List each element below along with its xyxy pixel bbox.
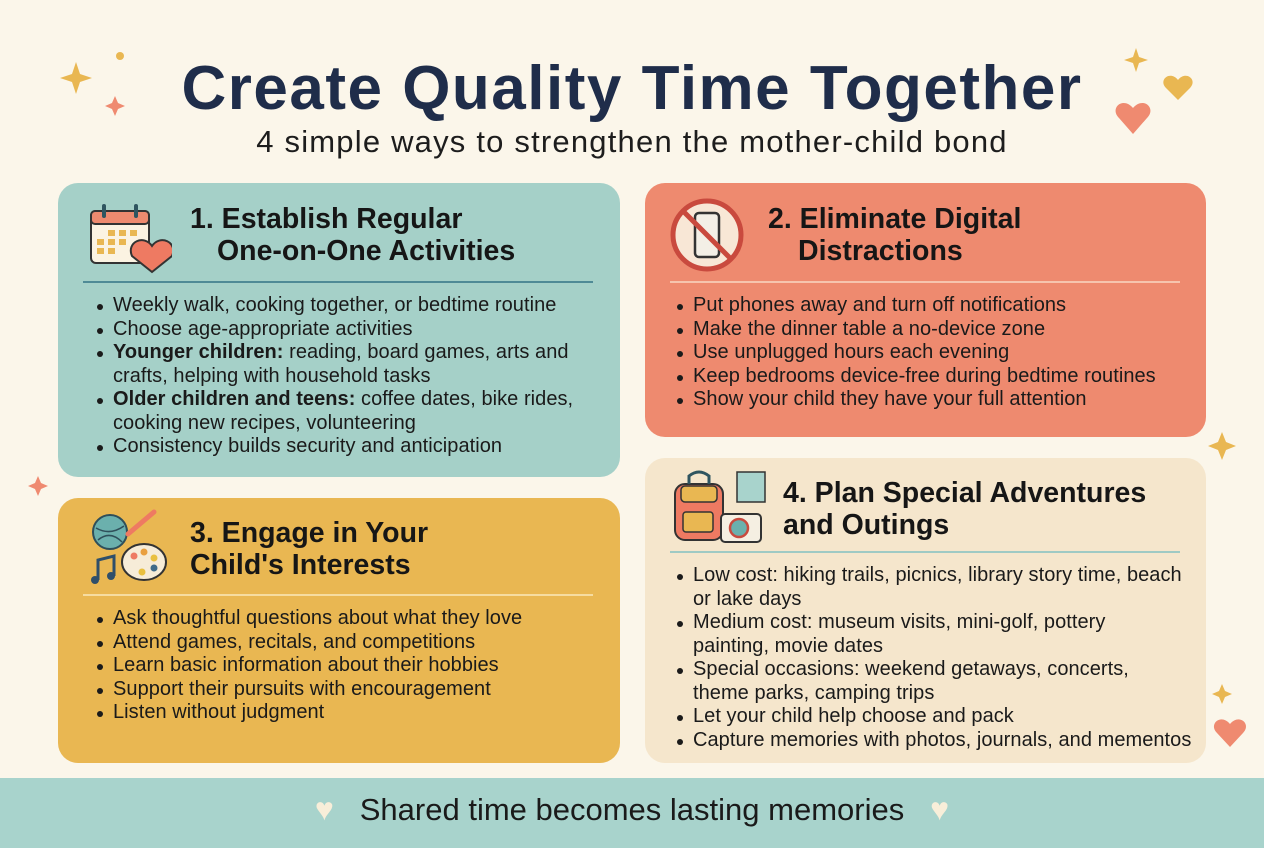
panel: 2 eliminate digital distractions — [645, 183, 1206, 437]
bullet list — [677, 294, 1156, 410]
bullet list: Make the dinner table a no-device zone — [693, 318, 1045, 340]
title: Create Quality Time Together — [181, 54, 1083, 123]
heading — [190, 203, 515, 267]
bullet list: Ask thoughtful questions about what they love — [113, 607, 522, 629]
bullet list: Learn basic information about their hobbies — [113, 654, 499, 676]
heading: 2. Eliminate Digital — [768, 203, 1021, 235]
bullet list: Medium cost: museum visits, mini-golf, pottery — [693, 611, 1105, 633]
bullet list: Use unplugged hours each evening — [693, 341, 1009, 363]
heading: and Outings — [783, 509, 949, 541]
bullet list: or lake days — [693, 588, 801, 610]
heading — [783, 477, 1146, 541]
bullet list: Low cost: hiking trails, picnics, library story time, beach — [693, 564, 1182, 586]
footer text with hearts: ♥ Shared time becomes lasting memories ♥ — [315, 791, 949, 827]
bullet list: cooking new recipes, volunteering — [113, 412, 416, 434]
bullet list: Weekly walk, cooking together, or bedtime routine — [113, 294, 556, 316]
panel: 1 one-on-one activities — [58, 183, 620, 477]
bullet list: Special occasions: weekend getaways, concerts, — [693, 658, 1129, 680]
subtitle: 4 simple ways to strengthen the mother-child bond — [256, 124, 1008, 159]
heading — [768, 203, 1021, 267]
bullet list: Younger children: reading, board games, arts and — [113, 341, 569, 363]
icon: no phone — [670, 198, 744, 272]
heading: 4. Plan Special Adventures — [783, 477, 1146, 509]
bullet list — [677, 564, 1191, 750]
icon: calendar with heart — [90, 204, 172, 274]
bullet list: Show your child they have your full attention — [693, 388, 1087, 410]
bullet list: Attend games, recitals, and competitions — [113, 630, 475, 652]
bullet list — [97, 294, 573, 457]
icon: backpack, map, camera — [674, 470, 766, 543]
footer banner — [0, 778, 1264, 848]
heading: 3. Engage in Your — [190, 517, 428, 549]
bullet list: theme parks, camping trips — [693, 682, 934, 704]
bullet list: crafts, helping with household tasks — [113, 364, 431, 386]
bullet list: Capture memories with photos, journals, and mementos — [693, 728, 1191, 750]
heading: Child's Interests — [190, 549, 411, 581]
bullet list: Consistency builds security and anticipation — [113, 435, 502, 457]
heading: One-on-One Activities — [217, 235, 515, 267]
bullet list: Support their pursuits with encouragement — [113, 678, 491, 700]
bullet list: Keep bedrooms device-free during bedtime routines — [693, 364, 1156, 386]
bullet list: Listen without judgment — [113, 701, 324, 723]
icon: yarn, palette, music note — [91, 510, 167, 584]
heading — [190, 517, 428, 581]
bullet list: Put phones away and turn off notifications — [693, 294, 1066, 316]
bullet list: Older children and teens: coffee dates, bike rides, — [113, 388, 573, 410]
heading: Distractions — [798, 235, 963, 267]
heading: 1. Establish Regular — [190, 203, 462, 235]
bullet list — [97, 607, 522, 723]
bullet list: Choose age-appropriate activities — [113, 318, 413, 340]
panel: 4 special adventures — [645, 458, 1206, 763]
bullet list: painting, movie dates — [693, 634, 883, 656]
bullet list: Let your child help choose and pack — [693, 705, 1014, 727]
panel: 3 engage in interests — [58, 498, 620, 763]
